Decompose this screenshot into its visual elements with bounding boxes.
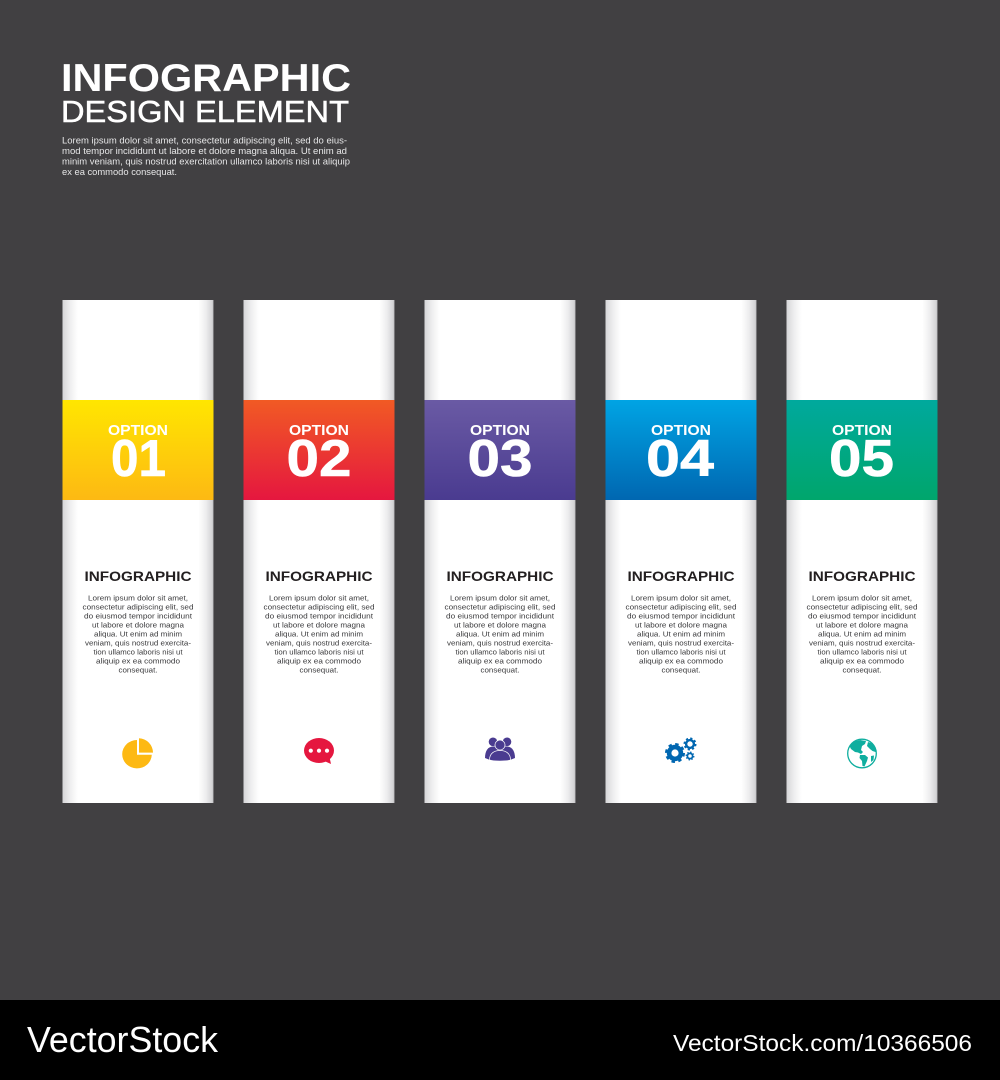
number 04: 04 [646,430,714,488]
number 01: 01 [111,430,166,488]
body text 03 [444,594,556,674]
body text 02: ut labore et dolore magna [273,620,366,630]
intro paragraph: ex ea commodo consequat. [62,166,177,177]
body text 04: aliqua. Ut enim ad minim [637,630,725,638]
intro paragraph: mod tempor incididunt ut labore et dolore magna aliqua. Ut enim ad [62,145,347,156]
body text 05: ut labore et dolore magna [816,620,909,630]
body text 03: veniam, quis nostrud exercita- [447,638,553,648]
panel: option 02 [244,300,394,803]
body text 04: consequat. [662,666,700,674]
body text 04: veniam, quis nostrud exercita- [628,638,734,648]
number 05: 05 [829,430,894,488]
icon: pie chart [122,738,153,768]
body text 02: consequat. [300,666,338,674]
body text 05: Lorem ipsum dolor sit amet, [812,594,912,602]
body text 03: do eiusmod tempor incididunt [446,612,555,620]
body text 01: consequat. [118,666,158,674]
body text 05: aliqua. Ut enim ad minim [818,630,906,638]
body text 02: do eiusmod tempor incididunt [265,612,374,620]
body text 05: veniam, quis nostrud exercita- [809,638,915,648]
body text 04 [626,594,736,674]
body text 02: aliqua. Ut enim ad minim [275,630,363,638]
title: INFOGRAPHIC [61,57,351,100]
body text 05: consequat. [842,666,882,674]
icon: speech bubble [304,738,334,764]
option label 03: OPTION [470,422,530,439]
footer logo text: VectorStock [27,1019,219,1060]
colour band 05 [786,400,938,500]
icon: globe [848,739,876,768]
icon: gears [666,738,696,762]
body text 05: aliquip ex ea commodo [820,656,904,666]
body text 01: aliqua. Ut enim ad minim [94,630,182,638]
body text 04: do eiusmod tempor incididunt [627,612,736,620]
body text 01: aliquip ex ea commodo [96,656,180,666]
colour band 01 [62,400,214,500]
panel: option 04 [606,300,756,803]
option label 02: OPTION [289,422,349,439]
heading 03: INFOGRAPHIC [446,568,554,584]
colour band 02 [244,400,394,500]
body text 04: Lorem ipsum dolor sit amet, [631,594,731,602]
body text 03: tion ullamco laboris nisi ut [456,648,545,656]
colour band 04 [606,400,756,500]
colour band 03 [424,400,576,500]
heading 05: INFOGRAPHIC [808,568,916,584]
watermark footer [0,1000,1000,1080]
body text 02: Lorem ipsum dolor sit amet, [269,594,369,602]
body text 01: consectetur adipiscing elit, sed [82,602,194,612]
option label 04: OPTION [651,422,711,439]
body text 02: aliquip ex ea commodo [277,656,361,666]
option label 05: OPTION [832,422,892,439]
body text 05 [806,594,918,674]
panel: option 01 [62,300,214,803]
body text 02: tion ullamco laboris nisi ut [274,648,364,656]
number 02: 02 [286,430,352,488]
number 03: 03 [468,430,532,488]
body text 04: ut labore et dolore magna [635,620,728,630]
body text 05: consectetur adipiscing elit, sed [806,602,918,612]
body text 02: veniam, quis nostrud exercita- [266,638,372,648]
intro paragraph: minim veniam, quis nostrud exercitation ullamco laboris nisi ut aliquip [62,156,350,166]
panel: option 03 [424,300,576,803]
panel: option 05 [786,300,938,803]
title block [61,57,351,177]
body text 01: tion ullamco laboris nisi ut [94,648,183,656]
body text 01: Lorem ipsum dolor sit amet, [88,594,188,602]
heading 02: INFOGRAPHIC [266,568,372,584]
body text 04: aliquip ex ea commodo [639,656,723,666]
body text 02 [264,594,374,674]
body text 03: Lorem ipsum dolor sit amet, [450,594,550,602]
body text 05: tion ullamco laboris nisi ut [818,648,907,656]
body text 03: ut labore et dolore magna [454,620,547,630]
body text 01: ut labore et dolore magna [92,620,185,630]
body text 04: tion ullamco laboris nisi ut [636,648,726,656]
body text 04: consectetur adipiscing elit, sed [626,602,736,612]
body text 03: consectetur adipiscing elit, sed [444,602,556,612]
body text 03: aliqua. Ut enim ad minim [456,630,544,638]
intro paragraph [62,134,350,177]
body text 03: aliquip ex ea commodo [458,656,542,666]
body text 01 [82,594,194,674]
footer url text: VectorStock.com/10366506 [673,1030,972,1056]
body text 05: do eiusmod tempor incididunt [808,612,917,620]
subtitle: DESIGN ELEMENT [61,95,349,129]
icon: people [485,738,515,761]
option label 01: OPTION [108,422,168,439]
heading 01: INFOGRAPHIC [84,568,192,584]
body text 01: veniam, quis nostrud exercita- [85,638,191,648]
body text 01: do eiusmod tempor incididunt [84,612,193,620]
intro paragraph: Lorem ipsum dolor sit amet, consectetur adipiscing elit, sed do eius- [62,134,347,146]
body text 03: consequat. [480,666,520,674]
body text 02: consectetur adipiscing elit, sed [264,602,374,612]
heading 04: INFOGRAPHIC [628,568,734,584]
